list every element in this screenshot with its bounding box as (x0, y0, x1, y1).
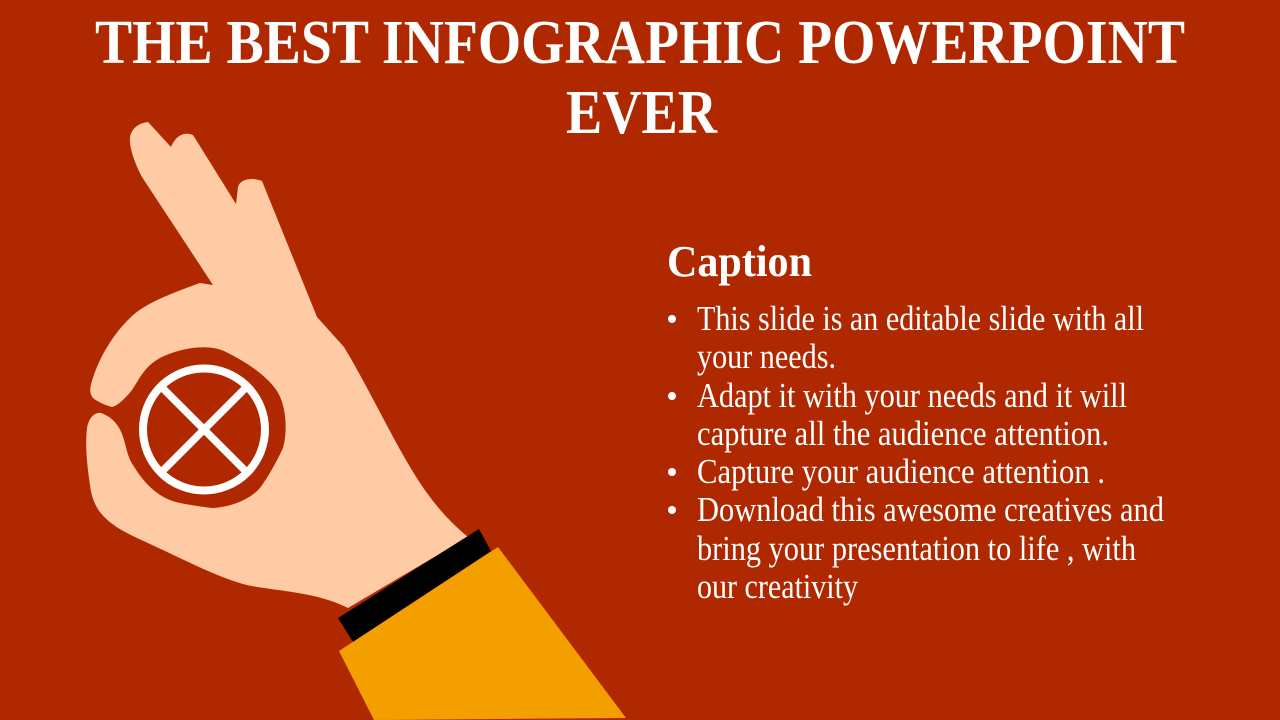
caption heading: Caption (667, 237, 812, 286)
bullet 1 (668, 299, 1144, 376)
bullet list (668, 299, 1164, 606)
icon: circled cross (143, 368, 265, 490)
illustration: OK hand gesture (86, 122, 626, 720)
title: EVER (566, 79, 718, 147)
bullet 4: Download this awesome creatives and (697, 490, 1164, 529)
title: THE BEST INFOGRAPHIC POWERPOINT (95, 9, 1185, 77)
hand (86, 122, 468, 608)
title (95, 9, 1185, 147)
bullet 4 (668, 490, 1164, 606)
bullet 1: your needs. (697, 337, 836, 376)
bullet 2: capture all the audience attention. (697, 414, 1109, 453)
bullet 2: Adapt it with your needs and it will (697, 376, 1127, 415)
bullet 1: This slide is an editable slide with all (697, 299, 1144, 338)
watch band (338, 529, 491, 642)
bullet 2 (668, 376, 1127, 453)
bullet 4: bring your presentation to life , with (697, 529, 1136, 568)
bullet 3: Capture your audience attention . (697, 452, 1105, 491)
sleeve (339, 547, 626, 720)
bullet 4: our creativity (697, 567, 858, 606)
